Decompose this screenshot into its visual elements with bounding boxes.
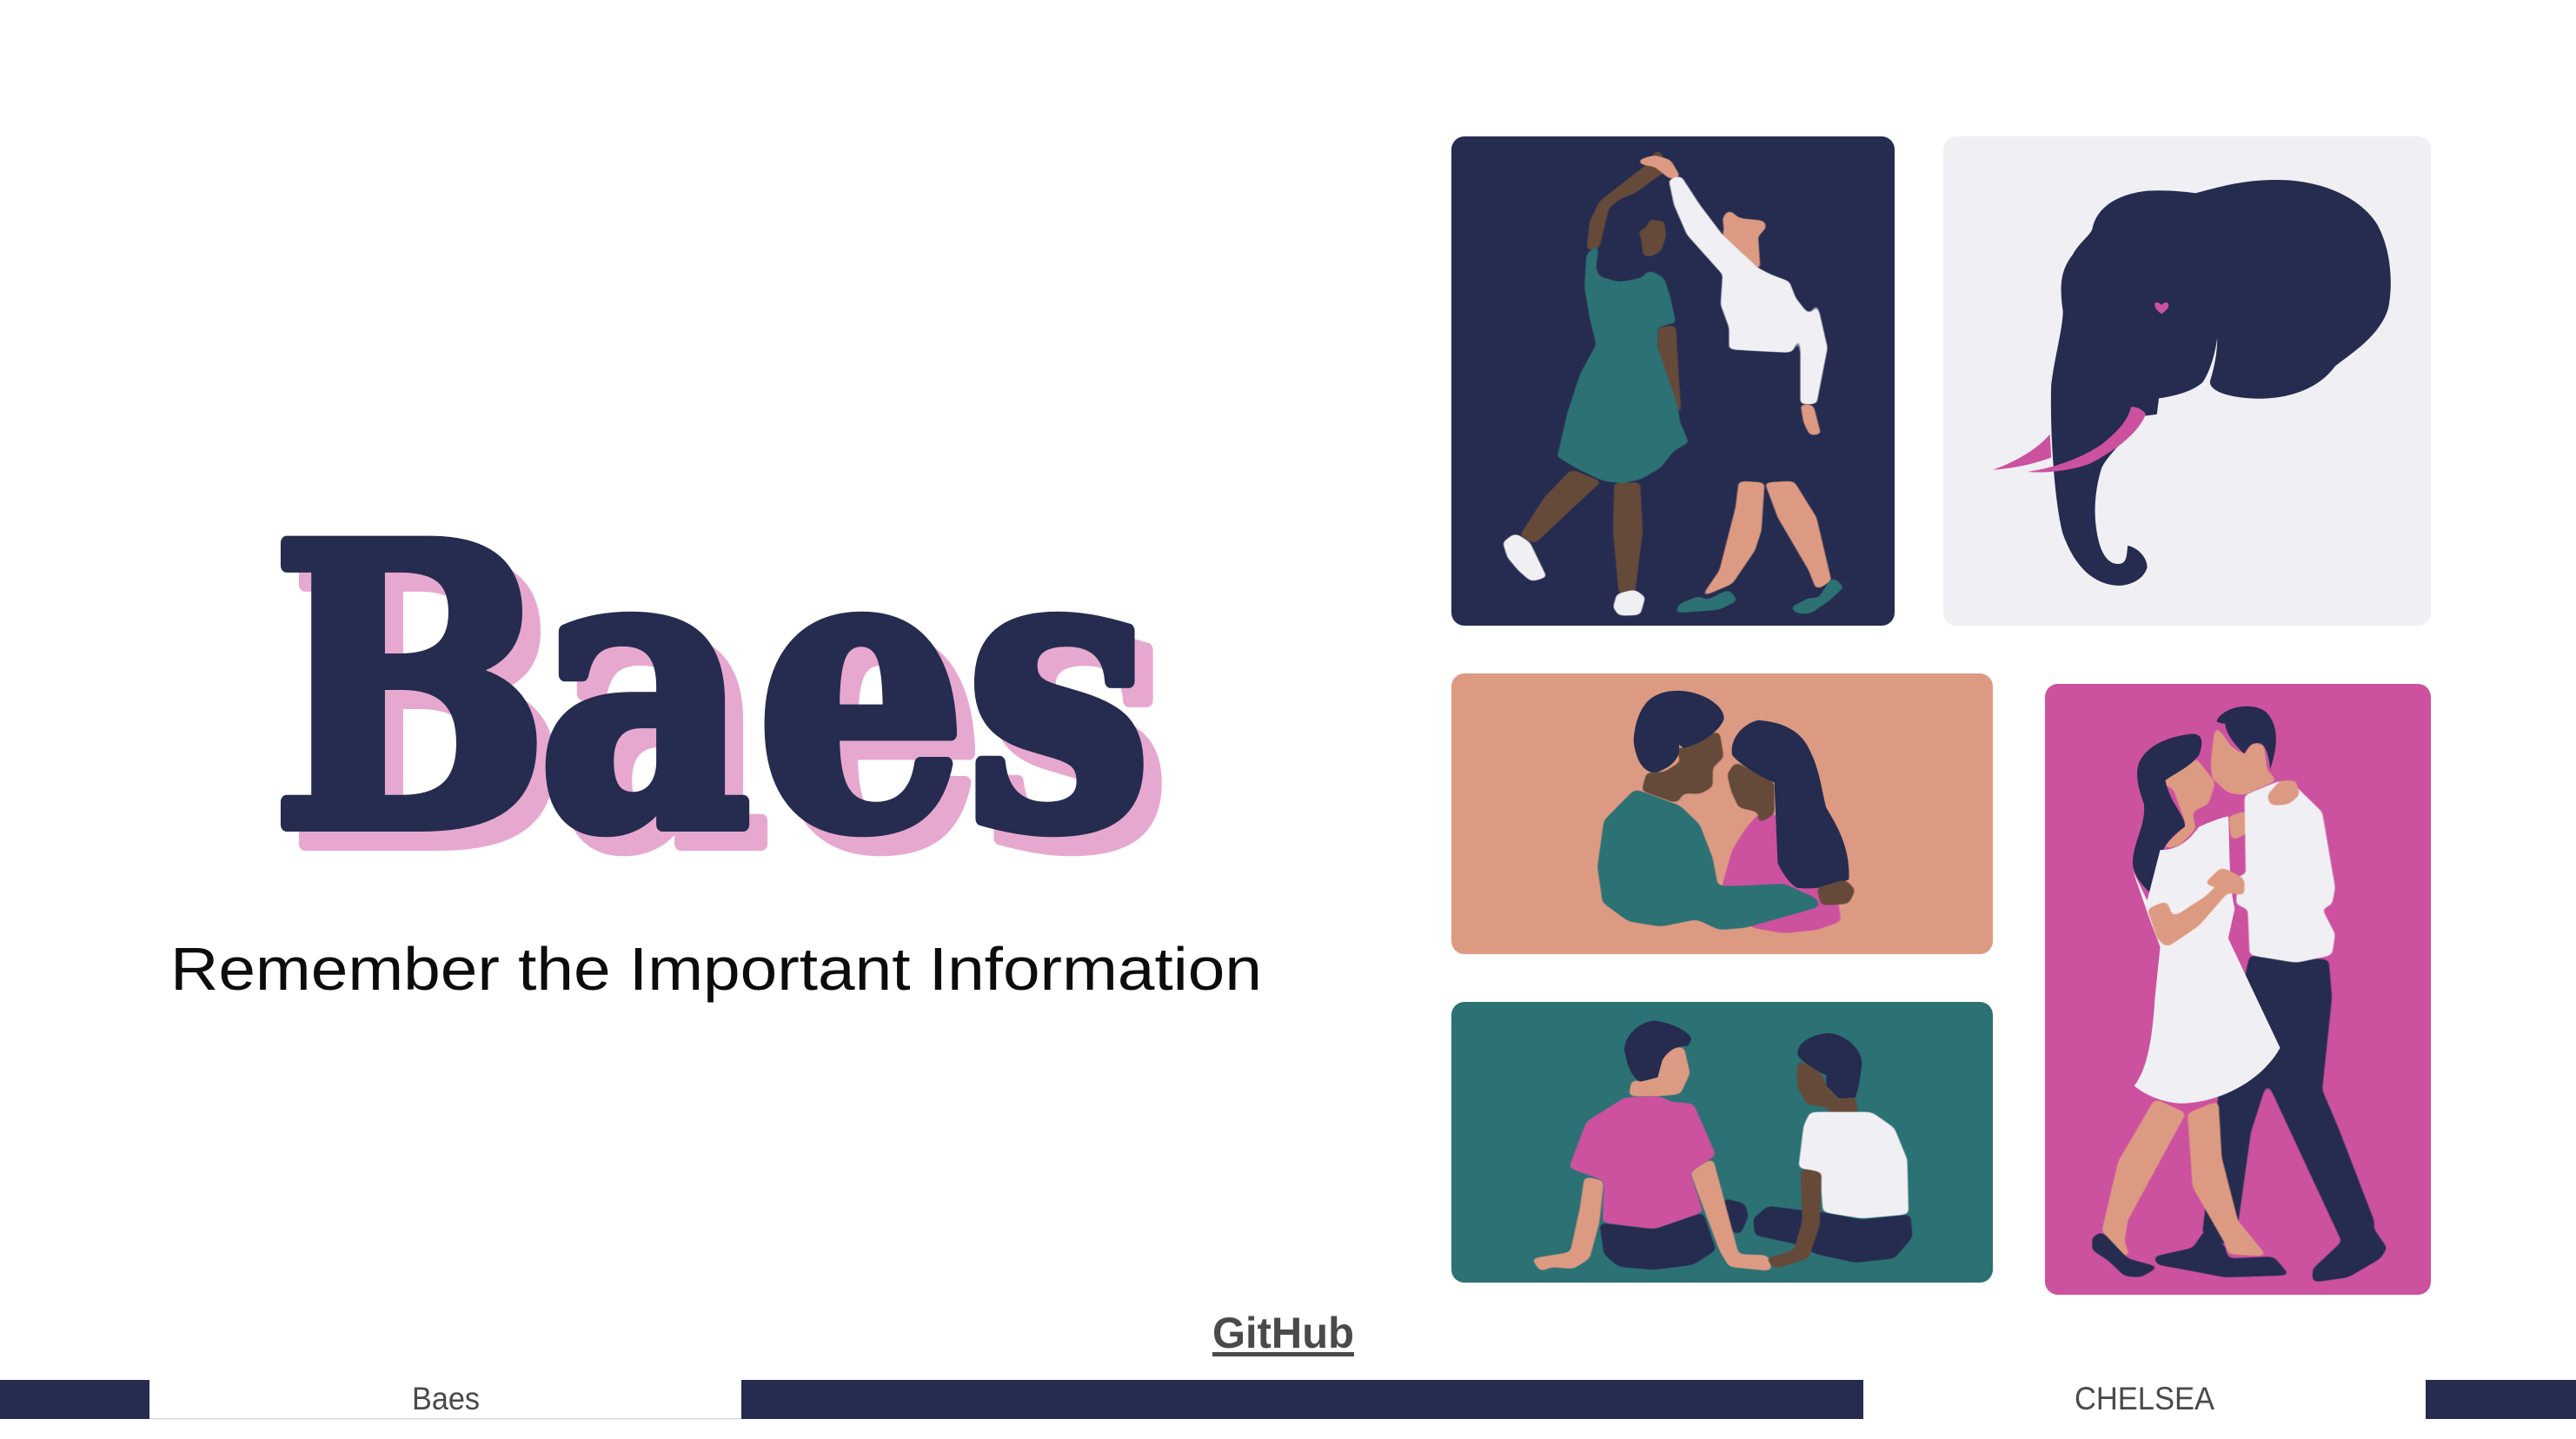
footer bar: [0, 1380, 2576, 1420]
logo title: Baes: Baes: [289, 481, 1169, 936]
footer text: Baes: Baes: [412, 1381, 480, 1416]
heart eye: [2154, 302, 2168, 314]
panel: embracing couple: [1451, 673, 1993, 954]
light-skinned dancer: [1638, 155, 1843, 613]
elephant head: [2051, 180, 2391, 586]
panel: seated couple: [1451, 1002, 1993, 1283]
panel: elephant: [1943, 136, 2431, 626]
footer text: CHELSEA: CHELSEA: [2075, 1381, 2214, 1416]
link: GitHub: GitHub: [1212, 1309, 1354, 1357]
subtitle: Remember the Important Information: [170, 935, 1262, 1003]
dark-skinned dancer: [1503, 148, 1689, 616]
tusk: [2028, 407, 2146, 473]
panel: kissing couple: [2045, 684, 2431, 1295]
logo title: Baes: Baes: [271, 462, 1151, 917]
panel: dancing couple: [1451, 136, 1895, 626]
